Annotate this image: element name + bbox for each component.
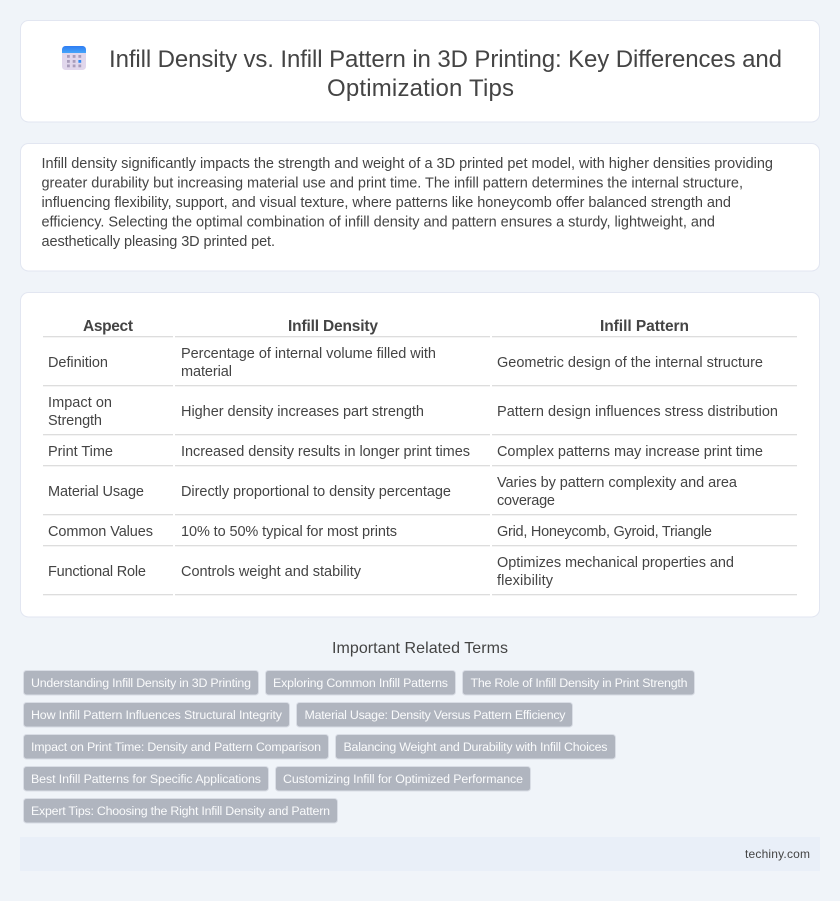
footer [20,837,820,871]
row: definition: Percentage of internal volume filled with [181,346,436,362]
tag: Balancing Weight and Durability with Infill Choices [344,740,608,754]
icon: calendar grid [62,46,86,70]
row: functional role: Functional Role [48,564,146,580]
tag [24,766,268,791]
panel: introduction text: aesthetically pleasing 3D printed pet. [42,234,275,250]
row: impact on strength: Impact on [48,395,112,411]
row: impact on strength: Higher density increases part strength [181,404,424,420]
table header row: Infill Density [288,318,378,335]
panel: introduction text: efficiency. Selecting the optimal combination of infill density and pattern ensures a sturdy, lightweight, and [42,214,715,230]
row: functional role: flexibility [497,573,554,589]
tag: Expert Tips: Choosing the Right Infill Density and Pattern [31,804,330,818]
tag [24,798,338,823]
row: definition [48,346,763,380]
row: print time: Print Time [48,444,113,460]
tag [276,766,530,791]
tag: Impact on Print Time: Density and Pattern Comparison [31,740,321,754]
tag [462,670,694,695]
row: functional role: Controls weight and stability [181,564,362,580]
row: definition: Definition [48,355,108,371]
title: Infill Density vs. Infill Pattern in 3D Printing: Key Differences and [109,46,782,73]
panel: header [20,20,820,122]
tag: Material Usage: Density Versus Pattern Efficiency [304,708,566,722]
tag: How Infill Pattern Influences Structural Integrity [31,708,283,722]
panel: introduction text: Infill density significantly impacts the strength and weight of a 3D printed pet model, with higher densities providing [42,156,773,172]
row: print time: Increased density results in longer print times [181,444,470,460]
row: definition: Geometric design of the internal structure [497,355,763,371]
tag [24,702,290,727]
footer: techiny.com [745,847,810,861]
row: material usage: Material Usage [48,484,144,500]
tag: Understanding Infill Density in 3D Printing [31,676,251,690]
row: impact on strength: Pattern design influences stress distribution [497,404,778,420]
row: common values: Common Values [48,524,153,540]
tag: Exploring Common Infill Patterns [273,676,448,690]
row: common values: 10% to 50% typical for most prints [181,524,397,540]
tag: Customizing Infill for Optimized Performance [283,772,523,786]
panel: introduction text: greater durability but increasing material use and print time. The infill pattern determines the internal structure, [42,176,743,192]
tag: The Role of Infill Density in Print Strength [470,676,688,690]
tag: Best Infill Patterns for Specific Applications [31,772,261,786]
row: functional role: Optimizes mechanical properties and [497,555,734,571]
row: impact on strength: Strength [48,413,102,429]
row: material usage [48,475,738,509]
row: material usage: Varies by pattern complexity and area [497,475,738,491]
row: impact on strength [48,395,778,429]
row: print time [48,444,763,460]
tag [24,734,328,759]
row: material usage: coverage [497,493,555,509]
row: functional role [48,555,734,589]
row: material usage: Directly proportional to density percentage [181,484,451,500]
table row rules [43,336,797,595]
panel: introduction text: influencing flexibility, support, and visual texture, where patterns like honeycomb offer balanced strength and [42,195,731,211]
row: definition: material [181,364,232,380]
table header row: Infill Pattern [600,318,689,335]
title [109,46,782,102]
related term tags [24,670,694,823]
panel: comparison table [20,292,820,617]
tag [336,734,616,759]
row: common values: Grid, Honeycomb, Gyroid, Triangle [497,524,712,540]
tag [296,702,572,727]
tag [266,670,456,695]
row: print time: Complex patterns may increase print time [497,444,763,460]
table header row: Aspect [83,318,133,335]
heading: important related terms: Important Related Terms [332,640,508,657]
panel: introduction text [20,144,820,271]
row: common values [48,524,712,540]
title: Optimization Tips [327,75,514,102]
table header row [83,318,689,335]
tag [24,670,258,695]
